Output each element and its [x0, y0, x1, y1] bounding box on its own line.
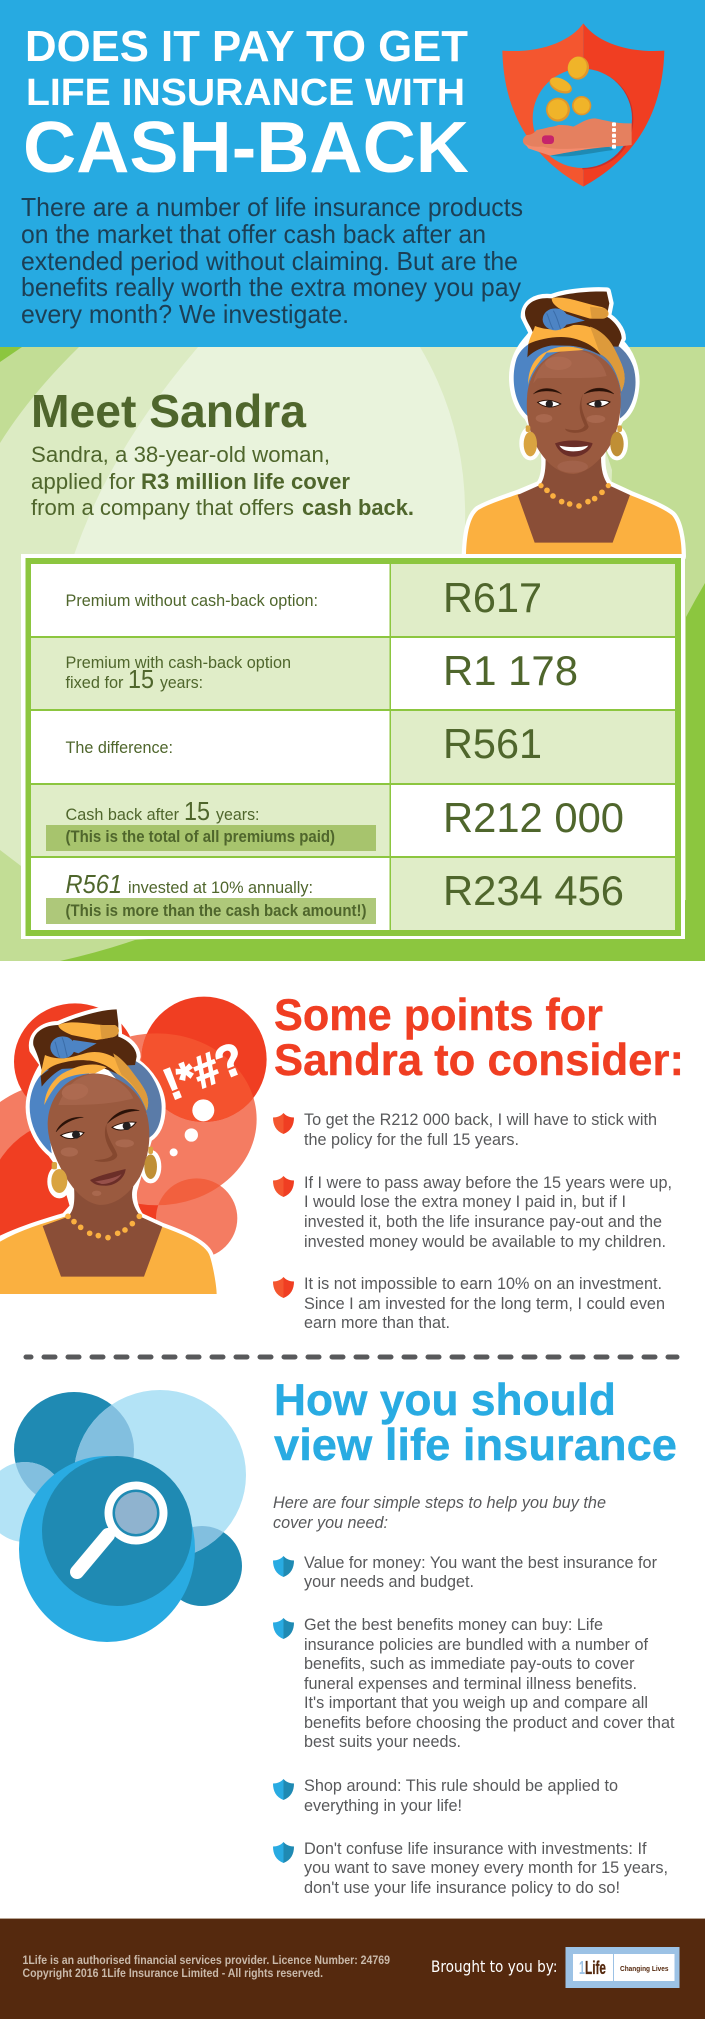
- text block: Sandra description: from a company that offers: [31, 495, 294, 520]
- text block: Sandra description: applied for: [31, 469, 135, 494]
- icon: blue shield: [273, 1779, 294, 1800]
- bullet: value for money: [273, 1553, 657, 1591]
- legal text: 1Life is an authorised financial services provider. Licence Number: 24769: [22, 1955, 390, 1967]
- bullet: passing away: If I were to pass away before the 15 years were up,: [304, 1173, 672, 1192]
- table row 2: [31, 638, 675, 709]
- legal text: Copyright 2016 1Life Insurance Limited - All rights reserved.: [22, 1968, 323, 1980]
- bullet: do not confuse with investments: don't use your life insurance policy to do so!: [304, 1878, 620, 1897]
- icon: blue shield: [273, 1556, 294, 1577]
- title: DOES IT PAY TO GET: [25, 22, 468, 71]
- bullet: shop around: Shop around: This rule should be applied to: [304, 1776, 618, 1795]
- text block: four steps intro: [273, 1493, 606, 1532]
- legal text: [22, 1955, 390, 1980]
- heading: points to consider: Some points for: [274, 991, 603, 1040]
- icon: red shield: [273, 1277, 294, 1298]
- table row 1: [31, 564, 675, 636]
- bullet: passing away: invested it, both the life insurance pay-out and the: [304, 1212, 662, 1231]
- bullet: best benefits: [273, 1615, 675, 1751]
- title: CASH-BACK: [23, 108, 469, 188]
- illustration: smiling Sandra: [466, 291, 682, 557]
- heading: Meet Sandra: Meet Sandra: [31, 385, 306, 437]
- bullet: earning 10 percent: earn more than that.: [304, 1313, 450, 1332]
- logo: 1Life Changing Lives: [566, 1947, 680, 1988]
- text block: Sandra description: Sandra, a 38-year-old woman,: [31, 442, 330, 467]
- speech symbols: !*#?: [156, 1032, 251, 1110]
- table row 2: R1 178: [443, 647, 578, 694]
- bullet: stick with the policy: the policy for the full 15 years.: [304, 1130, 519, 1149]
- head wrap: [527, 298, 625, 392]
- panel: meet Sandra background: [0, 347, 705, 961]
- heading: points to consider: [274, 991, 684, 1085]
- icon: blue shield: [273, 1842, 294, 1863]
- table row 2: Premium with cash-back option: [66, 653, 291, 672]
- title: LIFE INSURANCE WITH: [26, 72, 465, 114]
- bullet: best benefits: Get the best benefits money can buy: Life: [304, 1615, 603, 1634]
- table row 3: R561: [443, 720, 542, 767]
- intro paragraph: There are a number of life insurance products: [21, 192, 523, 222]
- intro paragraph: extended period without claiming. But are the: [21, 246, 518, 276]
- bullet: do not confuse with investments: you want to save money every month for 15 years,: [304, 1858, 668, 1877]
- text block: Sandra description: cash back.: [302, 495, 414, 520]
- icon: red shield: [273, 1113, 294, 1134]
- table row 3: [31, 711, 675, 783]
- brought to you by: Brought to you by:: [431, 1957, 558, 1976]
- bullet: best benefits: insurance policies are bundled with a number of: [304, 1635, 648, 1654]
- icon: red shield: [273, 1176, 294, 1197]
- table row 1: R617: [443, 574, 542, 621]
- bullet: best benefits: best suits your needs.: [304, 1732, 461, 1751]
- logo: 1Life Changing Lives: Changing Lives: [620, 1964, 668, 1973]
- bullet: passing away: invested money would be available to my children.: [304, 1232, 666, 1251]
- bullet: best benefits: funeral expenses and terminal illness benefits.: [304, 1674, 637, 1693]
- table row 5: [31, 858, 675, 930]
- text block: four steps intro: cover you need:: [273, 1513, 388, 1532]
- panel: comparison table: [21, 554, 685, 939]
- table row 1: Premium without cash-back option:: [66, 591, 318, 610]
- hair: [525, 291, 622, 347]
- intro paragraph: on the market that offer cash back after an: [21, 219, 486, 249]
- table row 4: Cash back after: [66, 805, 179, 824]
- heading: points to consider: Sandra to consider:: [274, 1036, 684, 1085]
- bullet: stick with the policy: To get the R212 000 back, I will have to stick with: [304, 1110, 657, 1129]
- illustration: magnifying glass on blue circles: [0, 1390, 246, 1642]
- heading: how you should view life insurance: How you should: [274, 1376, 616, 1425]
- bullet: best benefits: benefits before choosing the product and cover that: [304, 1713, 675, 1732]
- table row 5: R561: [66, 869, 122, 899]
- table row 5: (This is more than the cash back amount!): [66, 902, 366, 920]
- table row 4: 15: [184, 796, 210, 826]
- panel: footer: [0, 1918, 705, 2019]
- bullet: stick with the policy: [273, 1110, 657, 1149]
- table row 4: years:: [216, 805, 260, 824]
- bullet: do not confuse with investments: [273, 1839, 668, 1897]
- text block: Sandra description: [31, 442, 414, 520]
- table row 2: 15: [128, 664, 154, 694]
- bullet: do not confuse with investments: Don't confuse life insurance with investments: If: [304, 1839, 647, 1858]
- text block: Sandra description: R3 million life cover: [141, 469, 350, 494]
- table row 3: The difference:: [66, 738, 173, 757]
- woman figure: [0, 1009, 217, 1294]
- bullet: shop around: [273, 1776, 618, 1815]
- bullet: earning 10 percent: It is not impossible to earn 10% on an investment.: [304, 1274, 662, 1293]
- icon: shield with coins and hand: [502, 23, 664, 187]
- illustration: thinking Sandra with speech bubble: [0, 997, 267, 1297]
- bullet: passing away: [273, 1173, 672, 1251]
- table row 4: (This is the total of all premiums paid): [66, 828, 335, 846]
- head wrap: [41, 1022, 148, 1111]
- intro paragraph: every month? We investigate.: [21, 299, 349, 329]
- table row 2: years:: [160, 673, 203, 692]
- table row 5: invested at 10% annually:: [128, 878, 313, 897]
- heading: how you should view life insurance: [274, 1376, 677, 1470]
- bullet: earning 10 percent: [273, 1274, 665, 1332]
- bullet: best benefits: benefits, such as immediate pay-outs to cover: [304, 1654, 635, 1673]
- panel: header: [0, 0, 705, 348]
- table row 4: [31, 785, 675, 856]
- bullet: best benefits: It's important that you weigh up and compare all: [304, 1693, 648, 1712]
- intro paragraph: benefits really worth the extra money you pay: [21, 272, 521, 302]
- heading: how you should view life insurance: view life insurance: [274, 1421, 677, 1470]
- icon: blue shield: [273, 1618, 294, 1639]
- bullet: shop around: everything in your life!: [304, 1796, 462, 1815]
- bullet: value for money: Value for money: You want the best insurance for: [304, 1553, 657, 1572]
- logo: 1Life Changing Lives: Life: [585, 1958, 606, 1978]
- table row 5: R234 456: [443, 867, 624, 914]
- bullet: value for money: your needs and budget.: [304, 1572, 474, 1591]
- title: [23, 22, 469, 188]
- thought bubbles: [170, 1099, 214, 1156]
- intro paragraph: [21, 192, 523, 329]
- text block: four steps intro: Here are four simple steps to help you buy the: [273, 1493, 606, 1512]
- logo: 1Life Changing Lives: 1: [579, 1958, 585, 1978]
- hair: [33, 1009, 137, 1070]
- bullet: earning 10 percent: Since I am invested for the long term, I could even: [304, 1294, 665, 1313]
- table row 2: fixed for: [66, 673, 124, 692]
- bullet: passing away: I would lose the extra money I paid in, but if I: [304, 1192, 626, 1211]
- table row 4: R212 000: [443, 794, 624, 841]
